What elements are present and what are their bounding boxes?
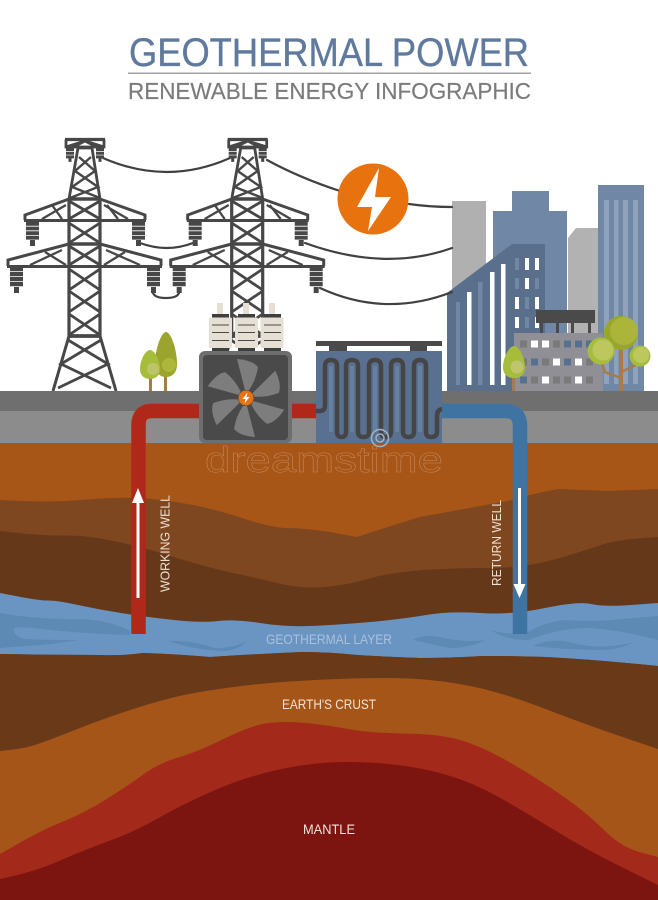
layer: mantle — [0, 762, 658, 900]
panel: transformer insulators — [209, 303, 284, 351]
building: gray chamfered — [568, 228, 598, 391]
pylon: left — [7, 140, 162, 391]
layer: top soil — [0, 443, 658, 900]
label: earth's crust: EARTH'S CRUST — [282, 696, 376, 712]
icon: city tree small — [503, 346, 525, 392]
layer: geothermal water — [0, 593, 658, 666]
exchanger coil — [316, 360, 442, 437]
panel: turbine fan unit — [199, 351, 292, 443]
arrow: up working well — [132, 488, 144, 598]
building: gray left — [452, 201, 486, 301]
icon: city tree large — [588, 316, 650, 391]
panel: underground layers — [0, 443, 658, 900]
title — [128, 31, 531, 104]
layer: dark rock — [0, 531, 658, 670]
building: tall blue tower — [598, 185, 644, 391]
watermark: dreamstime — [205, 439, 443, 480]
pipe: return well — [442, 411, 520, 634]
layer: earth crust upper band — [0, 652, 658, 760]
building: low gray with rooftop — [514, 310, 603, 391]
pylon: right — [170, 140, 325, 391]
insulator 2 — [235, 303, 258, 351]
ground strip — [0, 391, 658, 444]
arrow: down return well — [514, 488, 526, 598]
pipe: working well — [138, 411, 316, 634]
building: dark blue sloped front — [447, 244, 545, 391]
fan hub — [238, 390, 254, 406]
subheading: renewable energy infographic: RENEWABLE ENERGY INFOGRAPHIC — [128, 78, 531, 104]
heading: geothermal power: GEOTHERMAL POWER — [129, 31, 529, 75]
label: working well: WORKING WELL — [158, 495, 172, 592]
watermark — [205, 430, 443, 480]
panel: city skyline — [447, 185, 644, 391]
exchanger top bar — [316, 341, 442, 351]
icon: left trees — [140, 332, 177, 392]
insulator 1 — [209, 303, 232, 351]
insulator 3 — [260, 303, 284, 351]
fan blades — [206, 359, 286, 437]
label: return well: RETURN WELL — [489, 500, 504, 586]
label: mantle: MANTLE — [303, 821, 355, 837]
power cables — [103, 158, 452, 304]
icon: electricity bolt circle — [338, 164, 408, 234]
layer: earth's crust — [0, 678, 658, 900]
layer: brown rock — [0, 489, 658, 640]
panel: heat exchanger — [316, 341, 442, 443]
water currents — [0, 613, 658, 651]
layer: red magma — [0, 722, 658, 900]
label: geothermal layer: GEOTHERMAL LAYER — [266, 631, 392, 647]
building: blue stepped tower — [493, 191, 567, 391]
